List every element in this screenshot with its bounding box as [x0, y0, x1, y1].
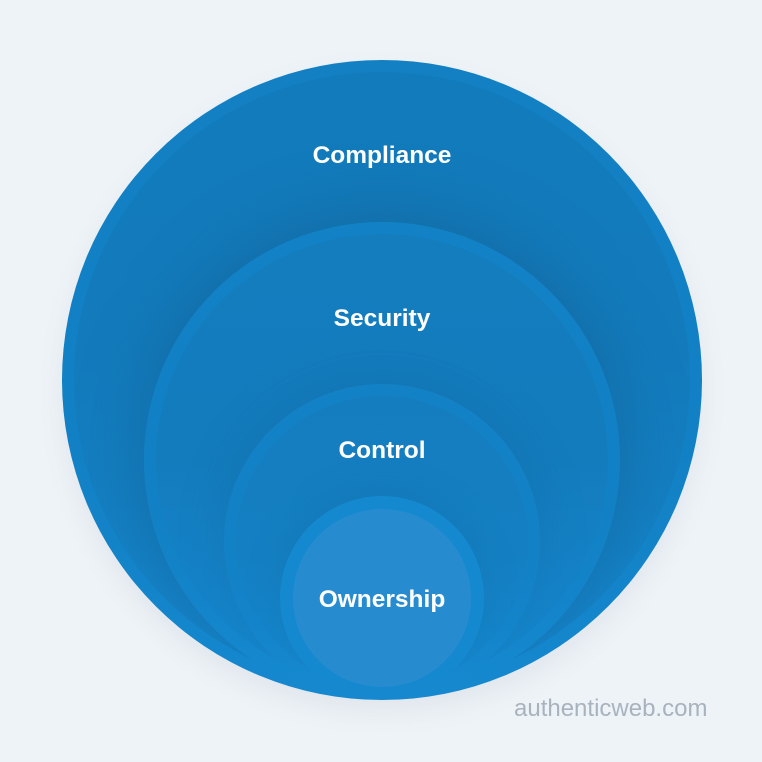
label: security: Security — [334, 305, 430, 332]
label: compliance: Compliance — [313, 142, 451, 169]
label: control: Control — [338, 437, 426, 464]
security inner disc — [156, 234, 608, 686]
label: ownership: Ownership — [319, 586, 445, 613]
circle: control — [224, 384, 540, 700]
concentric circle diagram — [62, 60, 702, 700]
circle: ownership ring — [280, 496, 484, 700]
circle: security — [144, 222, 620, 698]
control inner disc — [236, 396, 528, 688]
circle: compliance — [74, 72, 690, 688]
circle: ownership core — [293, 509, 471, 687]
watermark: authenticweb.com — [514, 695, 707, 722]
